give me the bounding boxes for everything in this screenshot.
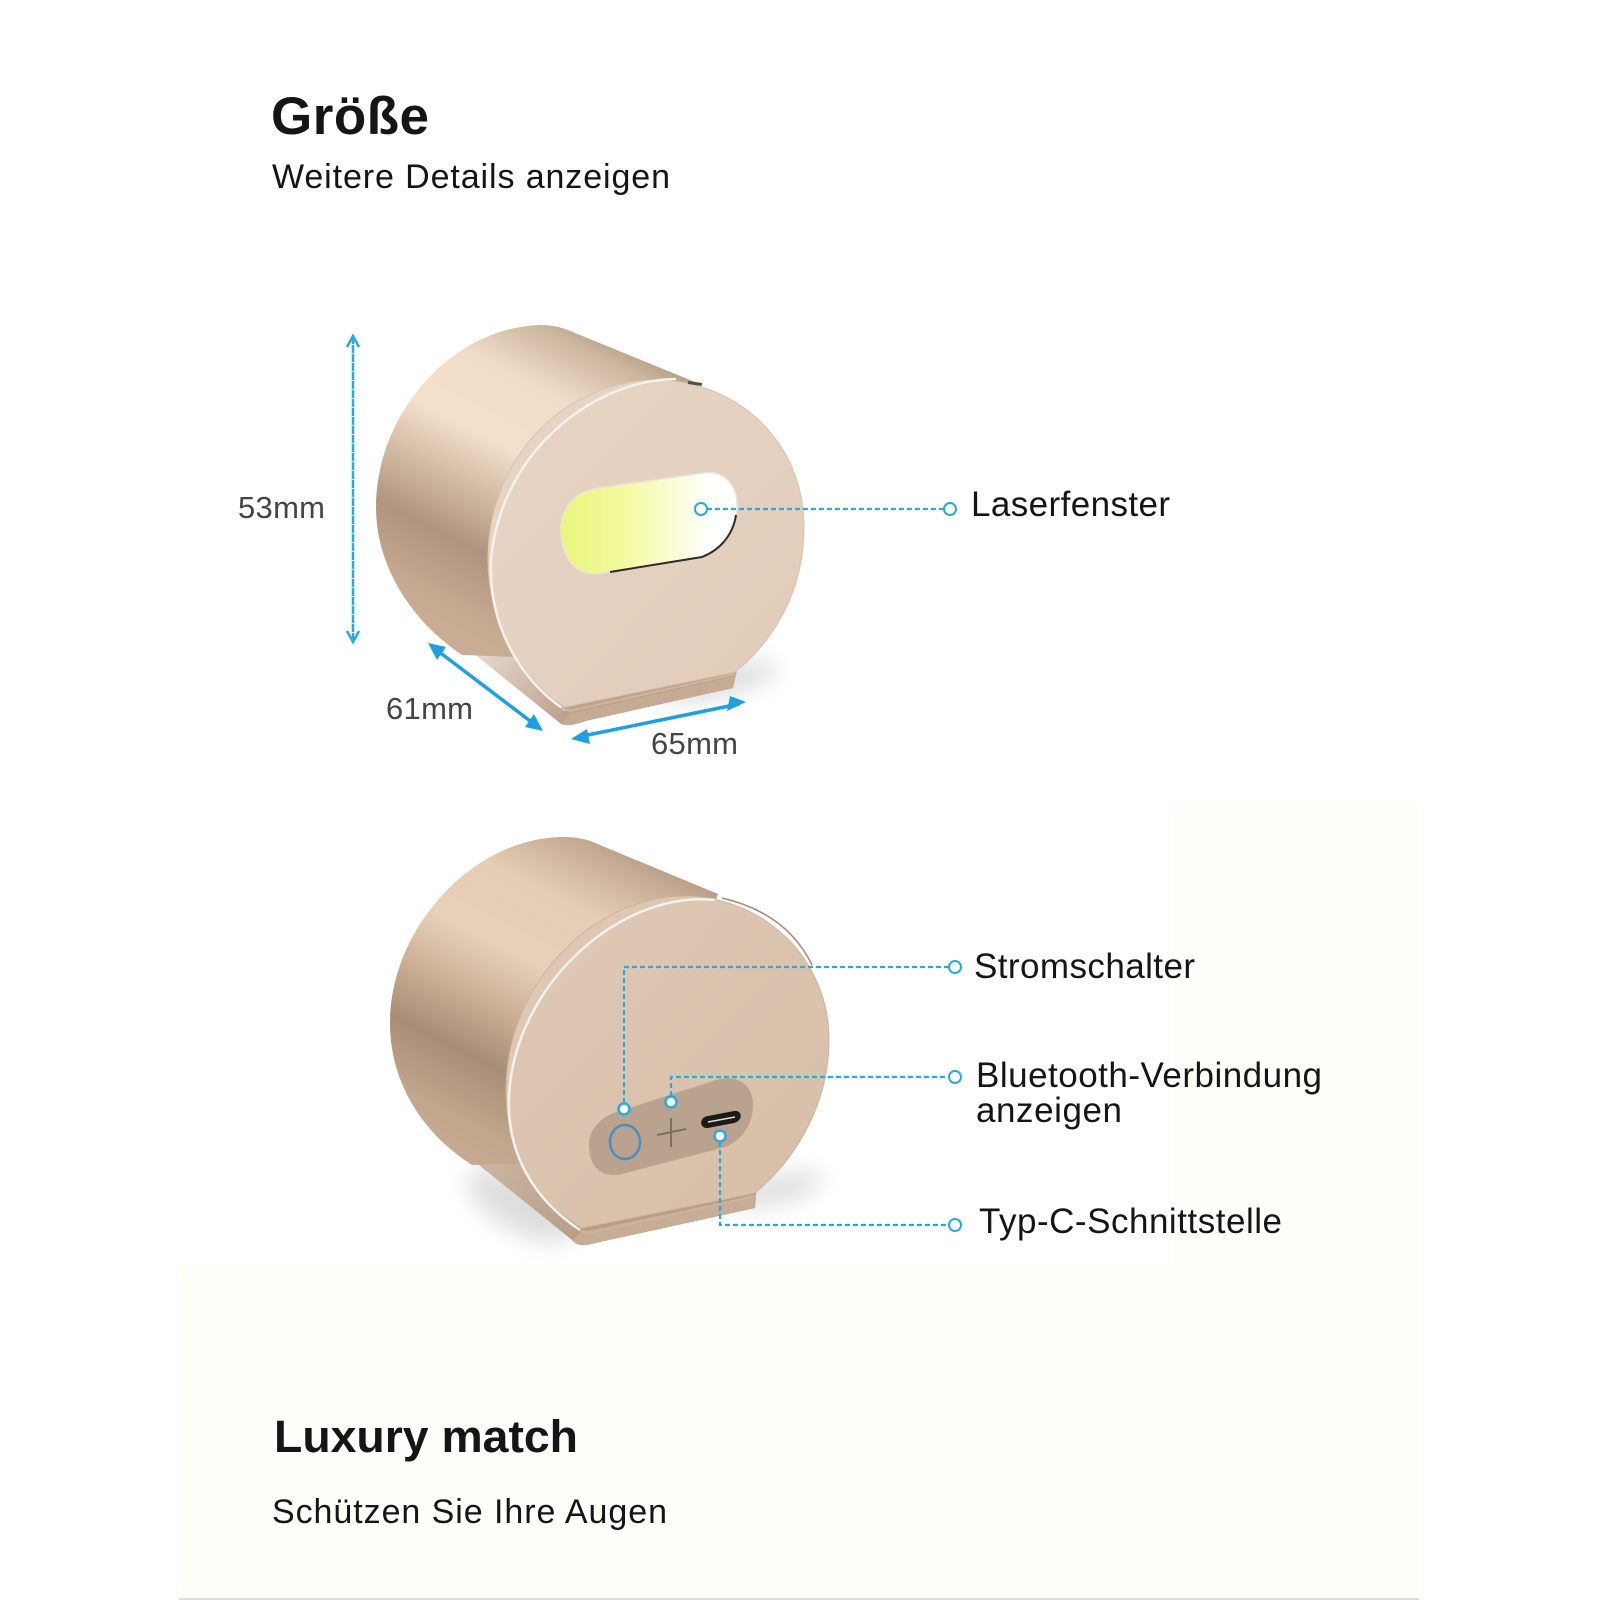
dimension arrow: width: [571, 696, 746, 744]
callout: Laserfenster: [695, 485, 1170, 524]
title: Größe: [271, 87, 429, 146]
callout: Bluetooth-Verbindung anzeigen: Bluetooth-Verbindung: [976, 1056, 1322, 1095]
background: cream panel: [179, 801, 1419, 1600]
callout: Stromschalter: [618, 947, 1195, 1114]
dimension arrow: depth: [428, 643, 543, 731]
product: laser device back view: [390, 837, 829, 1258]
callout: Bluetooth-Verbindung anzeigen: [666, 1056, 1322, 1130]
product: laser device front view: [376, 325, 804, 725]
callout: Typ-C-Schnittstelle: Typ-C-Schnittstelle: [979, 1202, 1282, 1241]
text: Schützen Sie Ihre Augen: Schützen Sie Ihre Augen: [272, 1493, 667, 1531]
icon: power ring: [610, 1125, 640, 1159]
callout: Bluetooth-Verbindung anzeigen: anzeigen: [976, 1091, 1122, 1130]
icon: USB-C port: [701, 1111, 741, 1128]
dimension label: 61mm: 61mm: [386, 691, 473, 726]
laser window: [561, 473, 737, 574]
callout: Typ-C-Schnittstelle: [714, 1130, 1282, 1241]
icon: plus: [657, 1118, 686, 1147]
dimension label: 65mm: 65mm: [651, 726, 738, 761]
dimension label: 53mm: 53mm: [238, 490, 325, 525]
heading: Luxury match: Luxury match: [274, 1411, 578, 1462]
callout: Laserfenster: Laserfenster: [971, 485, 1170, 524]
control panel: [589, 1078, 753, 1175]
dimension arrow: height: [347, 336, 359, 642]
subtitle: Weitere Details anzeigen: [272, 158, 670, 196]
callout: Stromschalter: Stromschalter: [974, 947, 1195, 986]
